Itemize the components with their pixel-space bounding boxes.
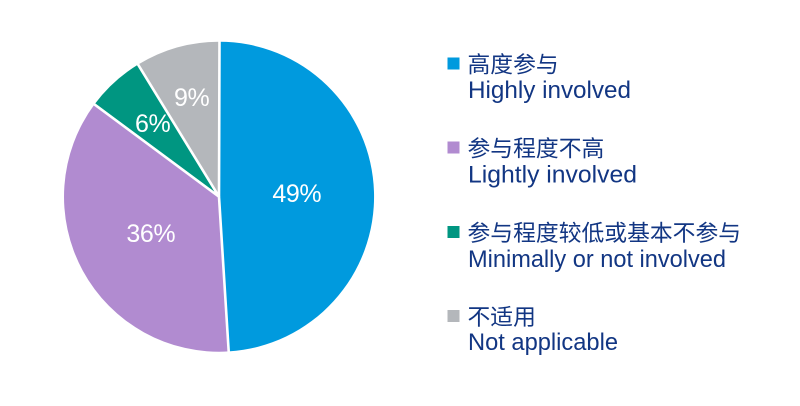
slice: highly involved 49%	[219, 42, 374, 351]
legend label English: Highly involved	[468, 77, 631, 104]
value label 36%: 36%	[126, 220, 175, 248]
swatch: grey	[448, 310, 460, 322]
swatch: green	[448, 226, 460, 238]
value label 49%: 49%	[272, 180, 321, 208]
legend item: not applicable	[448, 304, 618, 356]
legend item: highly involved	[448, 52, 631, 104]
swatch: purple	[448, 142, 460, 154]
legend label Chinese: 参与程度不高	[468, 136, 604, 162]
slice: lightly involved 36%	[64, 104, 229, 352]
slice: minimally or not involved 6%	[94, 64, 219, 197]
value label 9%: 9%	[174, 84, 210, 112]
slice: not applicable 9%	[138, 42, 219, 197]
legend	[448, 52, 741, 356]
legend label Chinese: 参与程度较低或基本不参与	[468, 220, 741, 246]
legend label English: Lightly involved	[468, 162, 637, 188]
pie chart	[64, 40, 374, 353]
value label 6%: 6%	[135, 110, 171, 138]
legend label English: Minimally or not involved	[468, 246, 726, 273]
legend label English: Not applicable	[468, 329, 618, 356]
legend label Chinese: 高度参与	[468, 52, 559, 78]
swatch: blue	[448, 58, 460, 70]
legend item: lightly involved	[448, 136, 637, 188]
legend item: minimally or not involved	[448, 220, 741, 273]
legend label Chinese: 不适用	[468, 304, 536, 330]
